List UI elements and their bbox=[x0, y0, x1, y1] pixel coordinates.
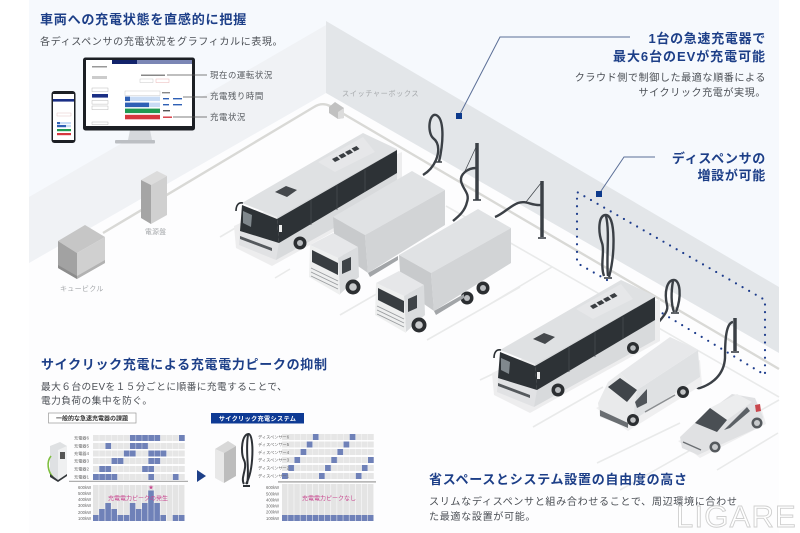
chart: conventional schedule: 充電器1 bbox=[74, 474, 90, 480]
heading: space saving bbox=[429, 472, 738, 523]
heading: cyclic charging: 最大６台のEVを１５分ごとに順番に充電することで、 bbox=[41, 380, 287, 393]
heading: space saving: た最適な設置が可能。 bbox=[429, 510, 536, 523]
cubicle bbox=[58, 225, 105, 293]
title: dashboard: 車両への充電状態を直感的に把握 bbox=[40, 11, 247, 27]
dotted expansion zone bbox=[577, 192, 765, 375]
conduit and parking lines bbox=[103, 104, 779, 490]
divider bbox=[69, 481, 188, 482]
chart: cyclic power: 充電電力ピークなし bbox=[302, 494, 356, 502]
icon: cabinet bbox=[215, 441, 236, 483]
heading: cyclic charging: 電力負荷の集中を防ぐ。 bbox=[41, 394, 153, 407]
chart: conventional power: 充電電力ピークの発生 bbox=[108, 494, 168, 502]
label: cyclic system: サイクリック充電システム bbox=[219, 415, 296, 423]
chart: cyclic power: 300kW bbox=[266, 504, 279, 508]
dashboard leader labels: 現在の運転状況 bbox=[210, 70, 273, 80]
truck 2 bbox=[375, 209, 511, 333]
power panel bbox=[141, 171, 167, 236]
chart: cyclic schedule: ディスペンサー1 bbox=[258, 472, 290, 480]
marker bbox=[456, 113, 462, 119]
chart: cyclic schedule: ディスペンサー3 bbox=[258, 456, 290, 464]
icon: slim dispenser bbox=[242, 434, 252, 486]
dispenser 1 bbox=[423, 115, 442, 175]
chart: conventional power: ★ bbox=[148, 485, 154, 491]
callout: six EV bbox=[456, 31, 766, 119]
truck 1 bbox=[309, 171, 445, 295]
dispenser 5 bbox=[657, 280, 680, 324]
chart: cyclic power: 400kW bbox=[266, 498, 279, 502]
label: conventional: 一般的な急速充電器の課題 bbox=[56, 414, 128, 422]
marker bbox=[596, 191, 602, 197]
chart: cyclic power: 500kW bbox=[266, 492, 279, 496]
chart: cyclic schedule: ディスペンサー6 bbox=[258, 434, 290, 440]
bus 2 bbox=[492, 280, 660, 413]
callout: six EV: 1台の急速充電器で bbox=[648, 31, 766, 46]
chart: cyclic power: 600kW bbox=[266, 485, 279, 490]
watermark: LIGARE bbox=[676, 499, 797, 533]
right wall bbox=[326, 21, 779, 353]
chart: conventional schedule: 充電器6 bbox=[74, 436, 90, 442]
chart: conventional schedule: 充電器2 bbox=[74, 466, 90, 472]
chart: conventional schedule: 充電器4 bbox=[74, 451, 90, 457]
divider bbox=[278, 481, 376, 482]
callout: six EV: クラウド側で制御した最適な順番による bbox=[575, 71, 766, 84]
heading: space saving: スリムなディスペンサと組み合わせることで、周辺環境に合わせ bbox=[429, 495, 738, 508]
heading: cyclic charging: サイクリック充電による充電電力ピークの抑制 bbox=[41, 357, 328, 372]
label: conventional bbox=[48, 413, 136, 423]
chart: conventional schedule: 充電器3 bbox=[74, 458, 90, 464]
arrow bbox=[197, 470, 206, 482]
switcher box bbox=[329, 89, 419, 119]
chart: cyclic power: 100kW bbox=[266, 516, 279, 521]
chart: cyclic power bbox=[266, 485, 374, 521]
callout: six EV: 最大6台のEVが充電可能 bbox=[613, 49, 766, 64]
chart: conventional power: 100kW bbox=[78, 516, 91, 521]
title: dashboard bbox=[40, 11, 283, 48]
bus 1 bbox=[234, 133, 402, 266]
heading: space saving: 省スペースとシステム設置の自由度の高さ bbox=[429, 472, 688, 487]
chart: conventional power: 400kW bbox=[78, 497, 91, 502]
chart: cyclic schedule: ディスペンサー5 bbox=[258, 441, 290, 448]
callout: dispenser expansion: ディスペンサの bbox=[672, 151, 766, 166]
chart: conventional power: 600kW bbox=[78, 485, 91, 490]
title: dashboard: 各ディスペンサの充電状況をグラフィカルに表現。 bbox=[40, 35, 283, 48]
chart: conventional power: 200kW bbox=[78, 510, 91, 515]
dashboard leader labels: 充電状況 bbox=[210, 112, 246, 122]
floor bbox=[29, 93, 779, 533]
dispenser 2 bbox=[453, 143, 481, 221]
monitor bbox=[83, 58, 195, 144]
callout: dispenser expansion: 増設が可能 bbox=[697, 168, 766, 183]
van bbox=[596, 337, 702, 431]
icon: charger bbox=[48, 442, 67, 482]
dispenser 3 bbox=[495, 181, 546, 238]
callout: six EV: サイクリック充電が実現。 bbox=[638, 86, 766, 99]
chart: conventional power: 300kW bbox=[78, 503, 91, 508]
chart: conventional power bbox=[78, 485, 185, 521]
chart: cyclic schedule: ディスペンサー2 bbox=[258, 464, 290, 472]
chart: cyclic power: 200kW bbox=[266, 510, 279, 514]
power panel: 電源盤 bbox=[145, 227, 166, 236]
switcher box: スイッチャーボックス bbox=[342, 89, 419, 98]
label: cyclic system bbox=[211, 413, 304, 424]
dispenser 4 bbox=[599, 215, 614, 278]
cubicle: キュービクル bbox=[60, 284, 104, 293]
dashboard leader labels: 充電残り時間 bbox=[210, 91, 264, 101]
chart: conventional schedule bbox=[74, 435, 185, 480]
chart: cyclic schedule: ディスペンサー4 bbox=[258, 449, 290, 456]
car bbox=[678, 394, 766, 458]
chart: cyclic schedule bbox=[258, 434, 374, 480]
dispenser 6 bbox=[696, 318, 739, 388]
phone bbox=[52, 91, 76, 143]
left wall bbox=[29, 25, 326, 263]
chart: conventional schedule: 充電器5 bbox=[74, 444, 90, 450]
chart: conventional power: 500kW bbox=[78, 491, 91, 496]
dashboard leader labels bbox=[167, 70, 273, 122]
heading: cyclic charging bbox=[41, 357, 328, 407]
callout: dispenser expansion bbox=[596, 151, 766, 197]
